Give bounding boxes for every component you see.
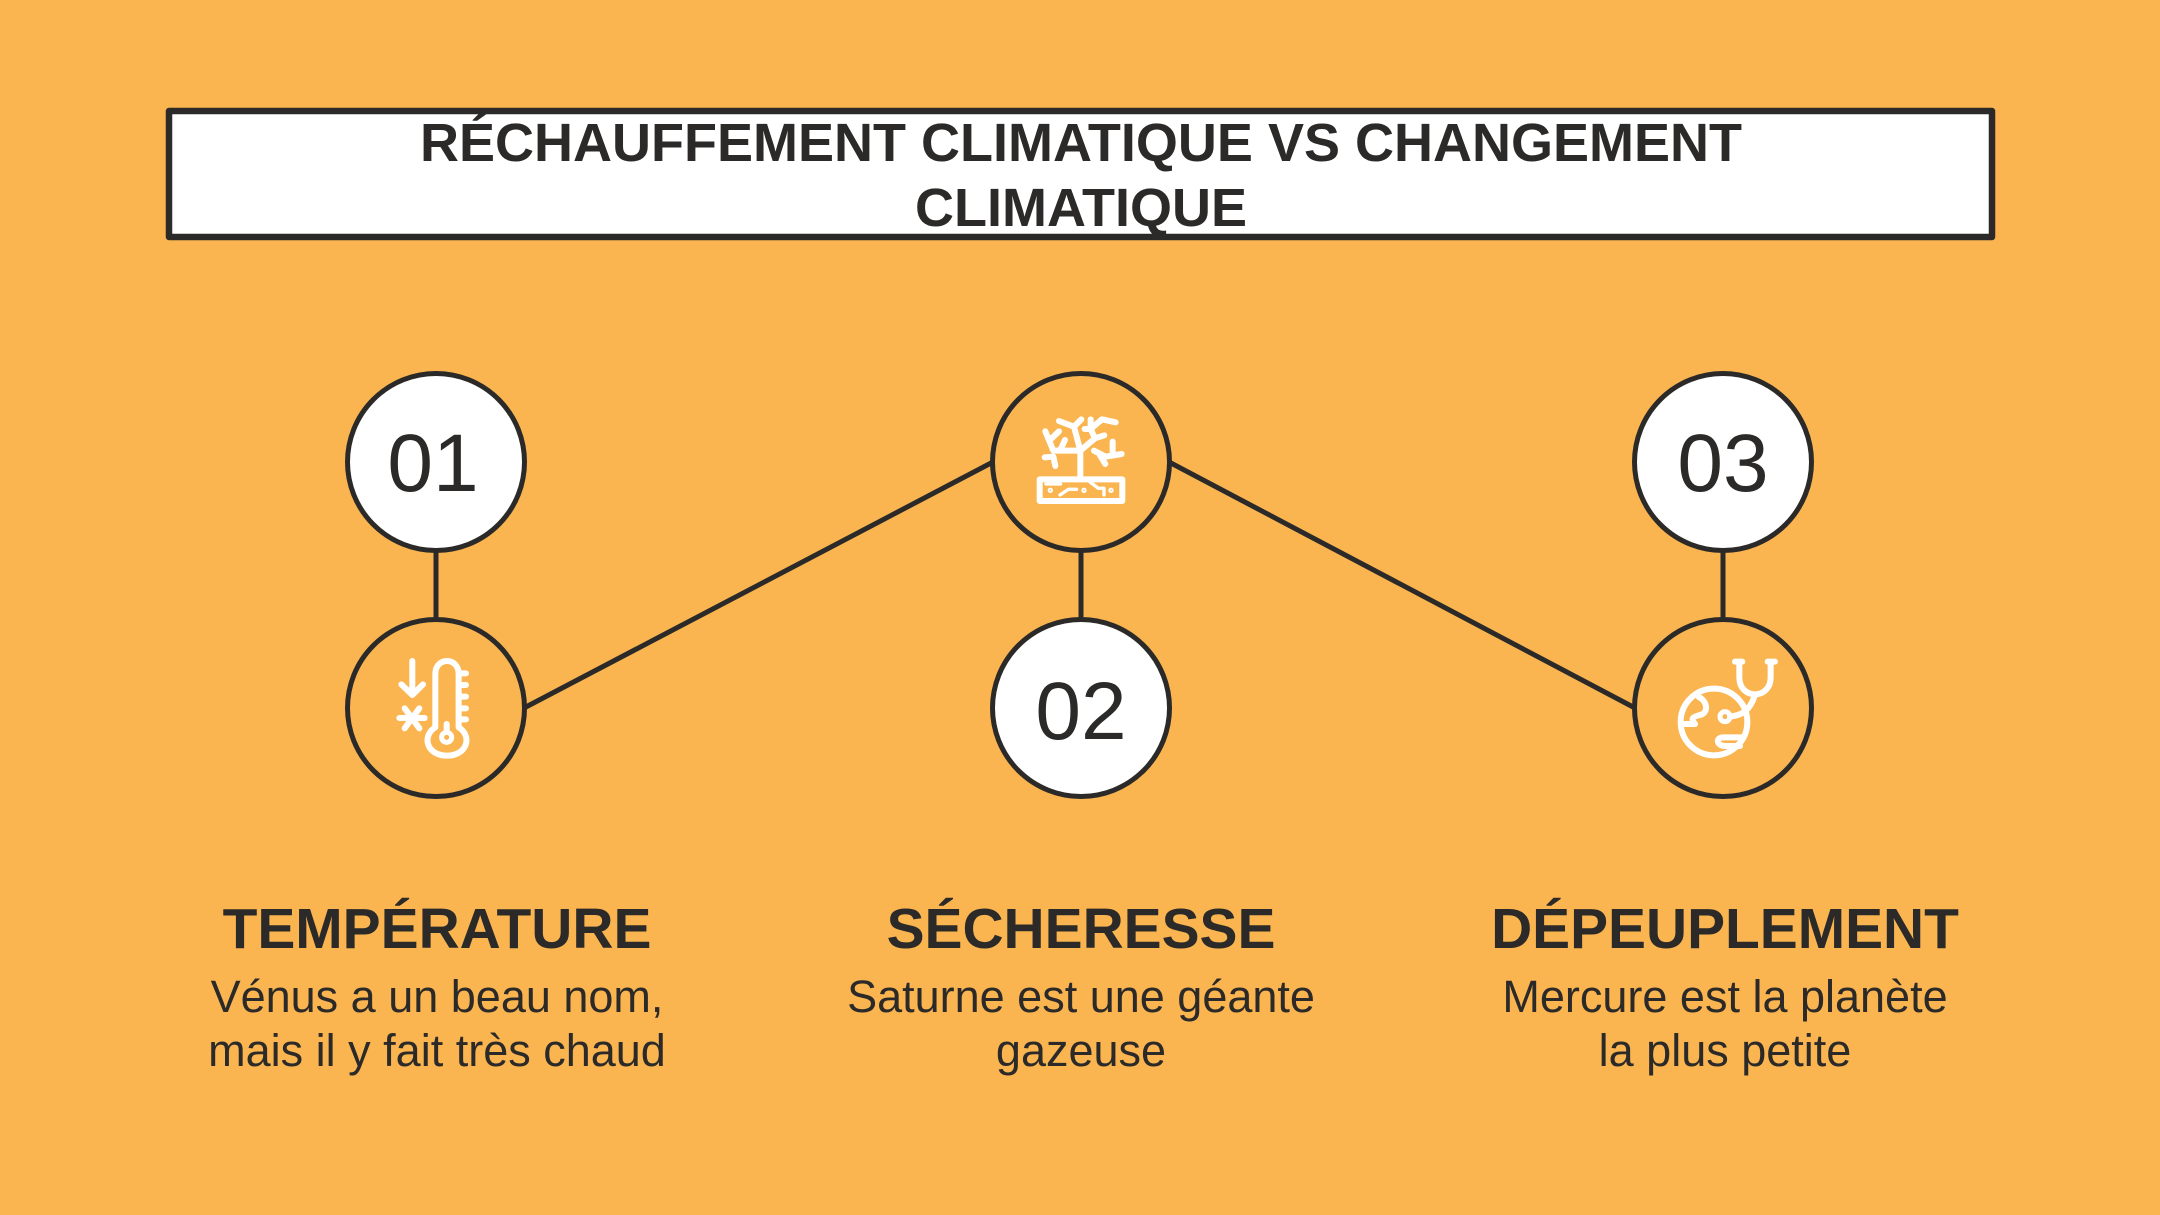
column 2: sécheresse: Saturne est une géante (847, 971, 1315, 1022)
column 3: dépeuplement: Mercure est la planète (1502, 971, 1948, 1022)
column 1: température: TEMPÉRATURE (223, 897, 651, 961)
step 2: number circle (992, 620, 1170, 796)
step 2: number circle: 02 (1035, 666, 1127, 757)
column 3: dépeuplement (1491, 897, 1959, 1076)
column 2: sécheresse: gazeuse (996, 1025, 1166, 1076)
column 3: dépeuplement: la plus petite (1599, 1025, 1851, 1076)
icon: planet and stethoscope (1681, 662, 1775, 755)
title banner (169, 111, 1992, 238)
step 1: number circle: 01 (387, 418, 479, 509)
column 3: dépeuplement: DÉPEUPLEMENT (1491, 897, 1959, 961)
icon: dry tree and cracked soil (1040, 419, 1122, 501)
step 2: icon circle with drought tree (992, 374, 1170, 550)
column 2: sécheresse: SÉCHERESSE (887, 897, 1275, 961)
title banner: CLIMATIQUE (915, 178, 1247, 238)
step 1: icon circle with thermometer (348, 620, 524, 796)
step 3: number circle: 03 (1677, 418, 1769, 509)
step 3: icon circle with planet stethoscope (1634, 620, 1812, 796)
column 1: température: Vénus a un beau nom, (211, 971, 663, 1022)
connector lines (436, 462, 1723, 708)
step 1: number circle (348, 374, 524, 550)
title banner: RÉCHAUFFEMENT CLIMATIQUE VS CHANGEMENT (420, 113, 1742, 173)
step 3: number circle (1634, 374, 1812, 550)
column 2: sécheresse (847, 897, 1315, 1076)
column 1: température (208, 897, 666, 1076)
column 1: température: mais il y fait très chaud (208, 1025, 666, 1076)
icon: thermometer and snowflake (399, 661, 466, 756)
